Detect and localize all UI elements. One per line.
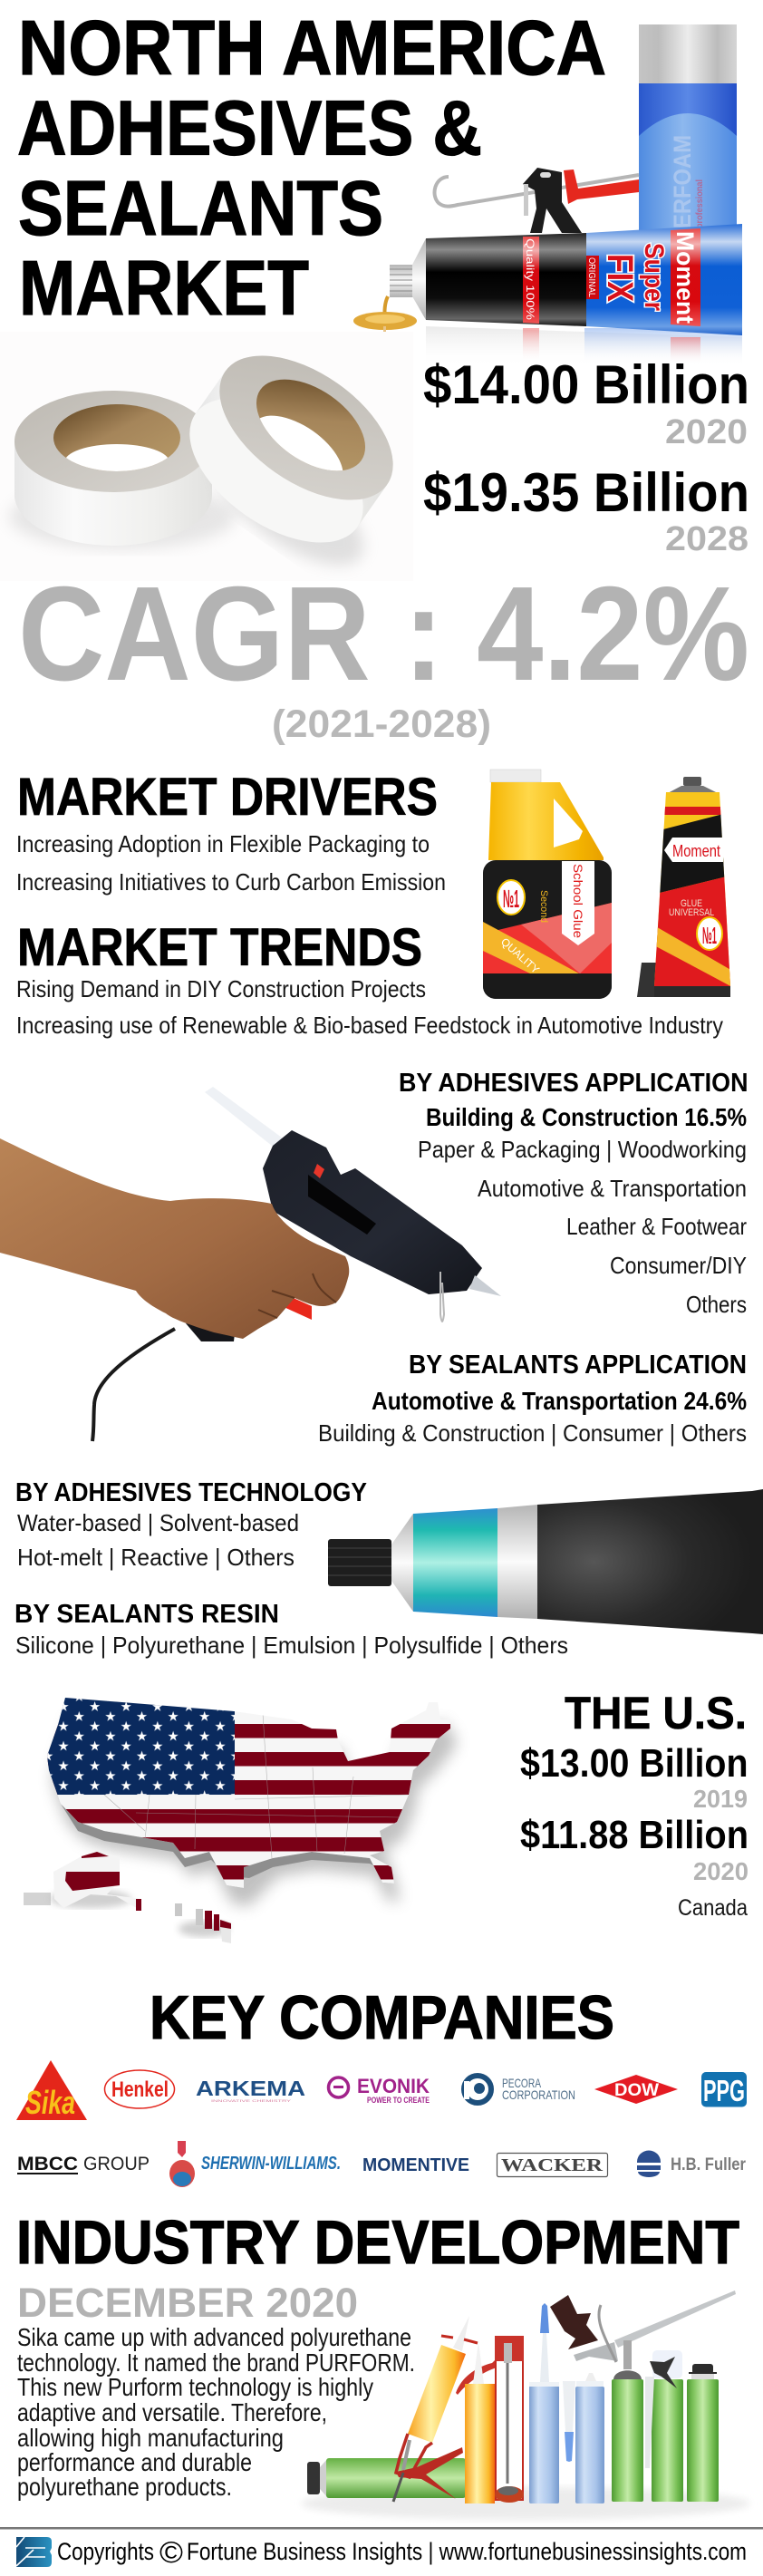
icon: US flag map — [36, 1686, 462, 1906]
blue cartridge 2 — [575, 2373, 604, 2503]
copyright text: © — [159, 2535, 183, 2569]
Canada: Canada — [678, 1895, 748, 1921]
panel: header — [17, 5, 742, 367]
icon: sealant tools group — [301, 2290, 750, 2520]
year 2028: 2028 — [665, 520, 749, 558]
icon: moment glue tube: GLUE — [681, 898, 702, 909]
logo: Sherwin-Williams: SHERWIN-WILLIAMS. — [201, 2154, 341, 2174]
logo: Wacker — [497, 2154, 607, 2177]
icon: moment glue tube: Moment — [672, 842, 720, 860]
icon: school glue bottle: School Glue — [571, 864, 585, 938]
icon: blue spray can: ERFOAM — [669, 135, 696, 228]
green horizontal can — [307, 2458, 466, 2498]
red upright gun — [495, 2336, 524, 2503]
body text: technology. It named the brand PURFORM. — [17, 2348, 415, 2377]
icon: moment glue tube: UNIVERSAL — [669, 907, 714, 918]
logo: H.B. Fuller: H.B. Fuller — [671, 2155, 747, 2174]
title: MARKET — [19, 246, 309, 332]
title — [17, 5, 606, 332]
body text: This new Purform technology is highly — [17, 2373, 373, 2401]
logo: MBCC Group: GROUP — [83, 2154, 150, 2174]
icon: glue tube: ORIGINAL — [586, 257, 596, 297]
icon: glue tube: Quality 100% — [524, 238, 536, 320]
logo: Henkel — [105, 2070, 174, 2108]
logo: PPG — [701, 2072, 747, 2107]
icon: moment glue tube — [637, 777, 734, 997]
body text: polyurethane products. — [17, 2473, 232, 2501]
icon: blue spray can — [639, 24, 737, 230]
blue cartridge 1 — [529, 2303, 559, 2503]
angled caulk gun cartridge — [393, 2316, 478, 2502]
year 2019: 2019 — [693, 1785, 748, 1813]
icon: moment glue tube: №1 — [702, 922, 717, 949]
icon: glue tube: Moment — [671, 231, 699, 324]
trend 1: Rising Demand in DIY Construction Projects — [16, 975, 426, 1002]
heading: market trends: MARKET TRENDS — [17, 918, 422, 977]
logo: MBCC Group: MBCC — [17, 2154, 78, 2174]
panel: CAGR — [18, 559, 749, 746]
heading: BY ADHESIVES TECHNOLOGY — [15, 1478, 367, 1507]
panel: market size — [423, 354, 749, 558]
copyright text: Copyrights — [57, 2538, 154, 2565]
logo: Dow — [594, 2075, 678, 2104]
segment list — [418, 1136, 747, 1318]
logo: Sherwin-Williams — [169, 2141, 341, 2187]
value 2020: $14.00 Billion — [423, 354, 749, 415]
green can 1 — [612, 2370, 643, 2502]
panel: company logos — [16, 2060, 747, 2187]
list row 1: Water-based | Solvent-based — [17, 1509, 299, 1536]
value 2028: $19.35 Billion — [423, 462, 749, 523]
date: DECEMBER 2020 — [17, 2280, 358, 2326]
icon: Hawaii — [175, 1903, 231, 1943]
icon: glue tube: Super — [639, 243, 669, 311]
panel: by sealants resin — [14, 1600, 568, 1659]
icon: school glue bottle — [483, 770, 612, 999]
list: Silicone | Polyurethane | Emulsion | Polysulfide | Others — [15, 1632, 568, 1659]
title: NORTH AMERICA — [18, 5, 606, 92]
red frame and trigger behind — [456, 2357, 498, 2395]
icon: glue drip — [353, 296, 417, 339]
logo: Arkema: INNOVATIVE CHEMISTRY — [211, 2098, 292, 2103]
body text — [17, 2323, 415, 2501]
body text: allowing high manufacturing — [17, 2424, 284, 2452]
orange cartridge — [465, 2341, 495, 2503]
logo: Arkema: ARKEMA — [196, 2077, 305, 2100]
panel: tape background tint — [0, 332, 413, 581]
panel: footer — [16, 2535, 747, 2569]
title: ADHESIVES & — [17, 85, 482, 172]
driver 2: Increasing Initiatives to Curb Carbon Emission — [16, 868, 446, 896]
logo: Evonik — [328, 2075, 430, 2105]
logo: MBCC Group — [17, 2154, 150, 2174]
logo: Pecora: CORPORATION — [502, 2087, 575, 2102]
panel: drivers and trends — [16, 768, 723, 1039]
year 2020: 2020 — [693, 1857, 749, 1885]
green can 2 — [645, 2350, 683, 2502]
year 2020: 2020 — [665, 413, 748, 451]
driver 1: Increasing Adoption in Flexible Packaging to — [16, 830, 430, 857]
foam gun — [550, 2290, 736, 2369]
icon: large tube — [328, 1489, 763, 1634]
heading: BY SEALANTS RESIN — [14, 1600, 279, 1629]
mini nozzle — [563, 2381, 575, 2462]
panel: by sealants application — [318, 1351, 747, 1447]
logo: Sika: Sika — [25, 2084, 75, 2121]
icon: tape rolls — [9, 355, 393, 569]
body text: performance and durable — [17, 2448, 252, 2476]
logo: Pecora: PECORA — [502, 2076, 541, 2090]
logo: Evonik: EVONIK — [357, 2075, 430, 2097]
icon: hand holding glue gun — [0, 1087, 501, 1441]
footer divider — [0, 2527, 763, 2529]
body text: Sika came up with advanced polyurethane — [17, 2323, 411, 2351]
CAGR period: (2021-2028) — [272, 702, 491, 746]
panel: by adhesives technology — [15, 1478, 367, 1571]
icon: school glue bottle: Second — [538, 890, 549, 923]
panel: by adhesives application — [399, 1069, 749, 1318]
heading: key companies: KEY COMPANIES — [150, 1983, 614, 2052]
icon: school glue bottle: №1 — [503, 885, 519, 913]
body text: adaptive and versatile. Therefore, — [17, 2398, 327, 2426]
logo: Wacker: WACKER — [501, 2155, 604, 2175]
logo: Evonik: POWER TO CREATE — [367, 2096, 430, 2105]
panel: the US figures — [520, 1688, 749, 1921]
icon: glue tube: FIX — [600, 254, 640, 302]
heading: market drivers: MARKET DRIVERS — [17, 768, 438, 827]
logo: H.B. Fuller — [637, 2150, 747, 2177]
logo: Dow: DOW — [614, 2081, 659, 2100]
logo: Momentive: MOMENTIVE — [362, 2155, 469, 2175]
panel: industry development text — [17, 2280, 415, 2501]
title: SEALANTS — [18, 166, 383, 252]
icon: caulking gun — [435, 168, 639, 233]
green can 3 — [687, 2364, 719, 2502]
icon: Alaska — [24, 1852, 141, 1911]
segment list: Others — [686, 1291, 747, 1318]
copyright text — [57, 2535, 747, 2569]
icon: school glue bottle: QUALITY — [498, 935, 542, 976]
icon: Fortune Business Insights logo — [16, 2537, 52, 2567]
segment list: Consumer/DIY — [610, 1252, 747, 1279]
icon: glue tube — [390, 224, 742, 367]
heading: THE U.S. — [565, 1688, 747, 1738]
logo: Sika — [16, 2060, 87, 2121]
icon: blue spray can: professional — [695, 179, 705, 228]
logo: Pecora — [464, 2076, 575, 2103]
logo: Henkel: Henkel — [111, 2077, 169, 2102]
list row 2: Hot-melt | Reactive | Others — [17, 1544, 295, 1571]
